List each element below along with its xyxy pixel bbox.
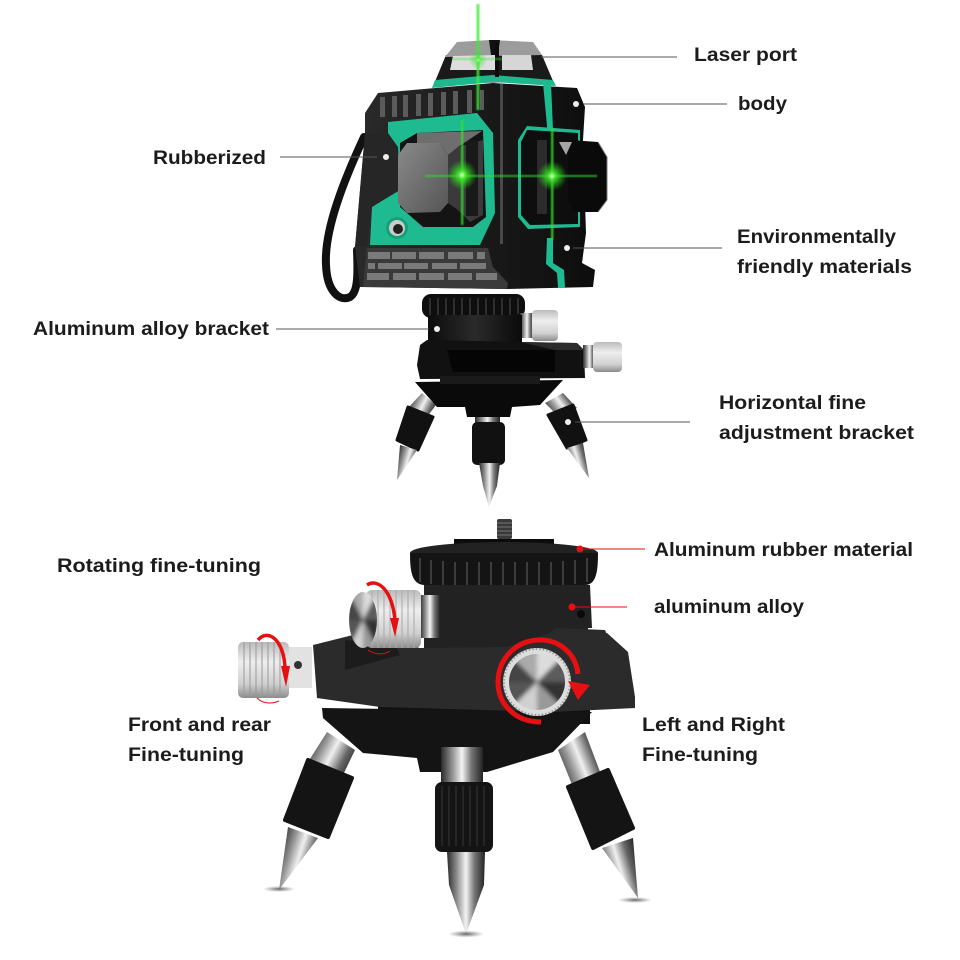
- callout: aluminum rubber material: Aluminum rubber material: [654, 539, 913, 561]
- callout: body: body: [738, 93, 787, 115]
- callout: environmentally friendly materials: Environmentally: [737, 226, 896, 248]
- yoke neck: [378, 700, 590, 724]
- back silver knob: [349, 590, 440, 648]
- left leg: [263, 732, 355, 892]
- teal lower stripe: [546, 238, 565, 288]
- icon: jack port: [386, 217, 408, 239]
- callout: aluminum alloy: [568, 596, 804, 618]
- base plate: [313, 632, 635, 712]
- callout: rubberized: [153, 147, 389, 169]
- mounting plate: [454, 539, 554, 551]
- upper adjustment bracket: [397, 294, 622, 507]
- device body: [355, 83, 595, 289]
- plate recess: [345, 640, 400, 670]
- callout: horizontal fine adjustment bracket: [565, 392, 915, 444]
- right teal frame: [518, 126, 607, 229]
- legs: small: [397, 393, 589, 507]
- callout: aluminum alloy: aluminum alloy: [654, 596, 804, 618]
- callout: rubberized: Rubberized: [153, 147, 266, 169]
- vent ribs: [380, 90, 484, 117]
- front fine-tuning knob: [503, 648, 571, 716]
- icon: wrist strap: [326, 137, 364, 298]
- callout: aluminum alloy bracket: [33, 318, 440, 340]
- right silver knob: [583, 342, 622, 372]
- corner seam: [500, 84, 503, 244]
- knurled top wheel: [422, 294, 525, 318]
- label: left and right fine-tuning: Left and Right: [642, 714, 786, 736]
- red rotation arrows: [257, 583, 590, 722]
- small hole and level: [550, 610, 609, 645]
- tripod yoke: [322, 708, 592, 772]
- bracket base plate: [417, 340, 585, 379]
- yoke neck: [440, 376, 540, 384]
- callout: environmentally friendly materials: friendly materials: [737, 256, 912, 278]
- callout: environmentally friendly materials: [564, 226, 912, 278]
- callout: horizontal fine adjustment bracket: adjustment bracket: [719, 422, 915, 444]
- right leg: [558, 732, 652, 903]
- callout: laser port: Laser port: [694, 44, 798, 66]
- label: rotating fine-tuning: Rotating fine-tuning: [57, 555, 261, 577]
- laser head: [432, 40, 556, 88]
- label: front and rear fine-tuning: [128, 714, 271, 766]
- label: front and rear fine-tuning: Fine-tuning: [128, 744, 244, 766]
- arrow: front knob rotation: [498, 640, 590, 722]
- callout: aluminum alloy bracket: Aluminum alloy bracket: [33, 318, 270, 340]
- left teal frame: [370, 113, 495, 245]
- arrow: back knob rotation: [367, 583, 399, 654]
- lower enlarged bracket: [238, 519, 652, 938]
- back silver knob: [520, 310, 558, 341]
- centre leg: [435, 725, 493, 938]
- screw: [497, 519, 512, 539]
- label: left and right fine-tuning: [642, 714, 786, 766]
- tripod yoke: [415, 380, 563, 417]
- rubber wheel: [410, 542, 598, 585]
- body grip dots: [355, 133, 398, 247]
- arrow: left knob rotation: [257, 635, 290, 703]
- bracket cylinder: [428, 315, 522, 347]
- label: left and right fine-tuning: Fine-tuning: [642, 744, 758, 766]
- callout: horizontal fine adjustment bracket: Horizontal fine: [719, 392, 866, 414]
- green laser beams: [425, 4, 597, 240]
- label: front and rear fine-tuning: Front and rear: [128, 714, 271, 736]
- rubber brick base: [363, 248, 508, 289]
- laser level product illustration: [326, 4, 607, 298]
- callout: body: [573, 93, 787, 115]
- cast aluminium body: [424, 585, 592, 650]
- teal vertical stripe: [543, 83, 553, 130]
- left silver knob: [238, 642, 312, 698]
